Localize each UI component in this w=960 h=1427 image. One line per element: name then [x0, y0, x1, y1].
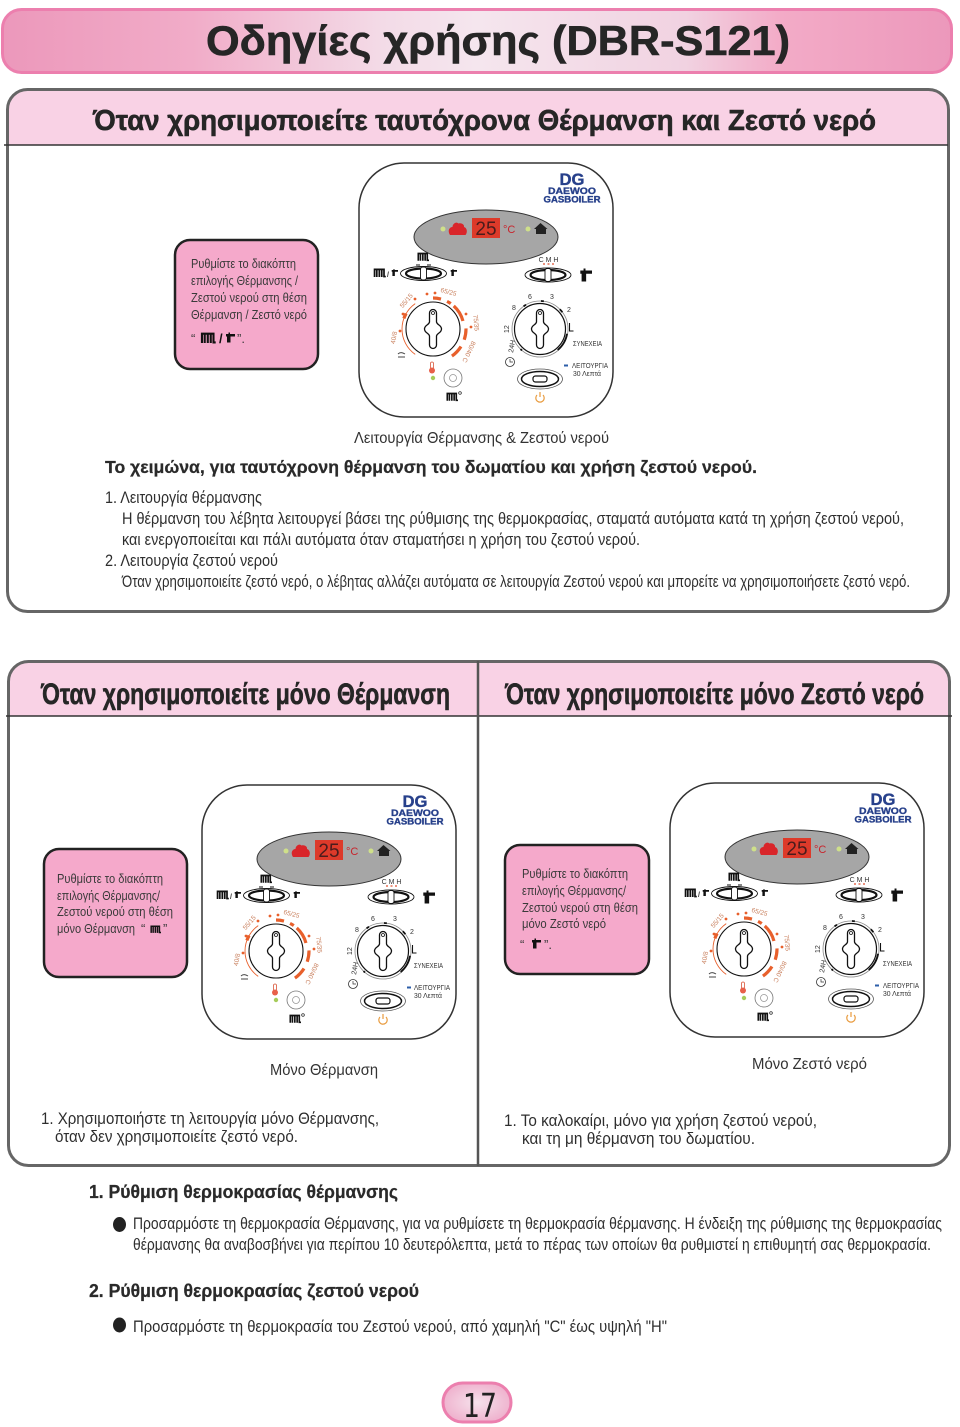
heating selector switch: /: [387, 272, 389, 279]
display: 25: [318, 841, 340, 862]
display: °C: [503, 224, 515, 236]
timer dial: 24H: [351, 961, 360, 975]
callout: hot-water-only instruction: επιλογής Θέρμανσης/: [522, 883, 626, 898]
heating temperature dial: 40/8: [390, 331, 399, 345]
bullet: [113, 1217, 126, 1232]
timer labels: ΣΥΝΕΧΕΙΑ: [883, 961, 912, 968]
clock icon: [506, 358, 514, 366]
reset knob: [287, 991, 305, 1023]
timer dial: 6: [528, 294, 532, 301]
logo: GASBOILER: [386, 816, 444, 828]
logo: DAEWOO: [548, 186, 596, 197]
callout: heating-only instruction: Ρυθμίστε το διακόπτη: [57, 871, 163, 886]
logo: [386, 793, 444, 828]
thermometer and status light: [429, 362, 435, 380]
callout: hot-water-only instruction: “: [520, 937, 524, 952]
callout: selector instruction: /: [219, 331, 223, 346]
text block: hot water only note: και τη μη θέρμανση του δωματίου.: [522, 1130, 755, 1148]
heating temperature dial: 80/40 C: [460, 340, 476, 364]
logo: GASBOILER: [854, 814, 912, 826]
heading: heating and hot water: Όταν χρησιμοποιείτε ταυτόχρονα Θέρμανση και Ζεστό νερό: [92, 105, 876, 137]
panel: heating and hot water together: [4, 90, 948, 612]
clock icon: [816, 978, 826, 986]
timer labels: [564, 341, 608, 378]
text block: heating only note: όταν δεν χρησιμοποιείτε ζεστό νερό.: [55, 1128, 298, 1146]
display: °C: [814, 844, 826, 856]
callout: selector instruction: [175, 240, 318, 369]
callout: selector instruction: “: [191, 331, 195, 346]
timer labels: 30 Λεπτά: [883, 990, 911, 998]
heating temperature dial: 40/8: [233, 953, 242, 967]
timer dial: 8: [512, 305, 516, 312]
text block: hot water only note: [504, 1112, 817, 1148]
heating temperature dial: [701, 907, 791, 984]
text block: heating only note: [41, 1110, 379, 1146]
callout: heating-only instruction: μόνο Θέρμανση: [57, 921, 135, 936]
caption: hot water only: Μόνο Ζεστό νερό: [752, 1056, 867, 1073]
callout: hot-water-only instruction: Ζεστού νερού στη θέση: [522, 900, 638, 915]
heating temperature dial: 75/35: [314, 936, 323, 954]
logo: DG: [560, 171, 584, 189]
heating selector switch: [686, 874, 768, 900]
control panel diagram: [359, 163, 613, 417]
timer dial: 24H: [508, 339, 517, 353]
thermometer and status light: [272, 984, 278, 1002]
timer labels: [875, 961, 919, 998]
panel: single-mode use: [6, 661, 952, 1166]
timer dial: 6: [839, 914, 843, 921]
heating temperature dial: 65/25: [751, 907, 769, 918]
heating temperature dial: 55/15: [242, 914, 258, 932]
timer labels: 30 Λεπτά: [573, 370, 601, 378]
page number: [443, 1383, 511, 1425]
heating temperature dial: [233, 909, 323, 986]
text block: operation notes: [105, 489, 910, 591]
heating temperature dial: 40/8: [701, 951, 710, 965]
power button: [360, 991, 406, 1024]
callout: hot-water-only instruction: Ρυθμίστε το διακόπτη: [522, 866, 628, 881]
callout: selector instruction: Θέρμανση / Ζεστό νερό: [191, 307, 307, 322]
display: 25: [475, 219, 497, 240]
logo: DAEWOO: [391, 808, 439, 819]
timer dial: 3: [550, 294, 554, 301]
timer dial: 12: [347, 947, 354, 955]
timer dial: 12: [504, 325, 511, 333]
logo: [544, 171, 601, 206]
display: [257, 832, 401, 886]
heating selector switch: /: [698, 892, 700, 899]
callout: heating-only instruction: επιλογής Θέρμανσης/: [57, 888, 160, 903]
callout: hot-water-only instruction: ”.: [544, 937, 552, 952]
timer dial: 2: [878, 927, 882, 934]
timer dial: [815, 914, 884, 977]
heating temperature dial: 65/25: [283, 909, 301, 920]
timer dial: 3: [861, 914, 865, 921]
timer labels: ΣΥΝΕΧΕΙΑ: [414, 963, 443, 970]
callout: heating-only instruction: Ζεστού νερού στη θέση: [57, 904, 173, 919]
timer dial: 8: [355, 927, 359, 934]
display: [725, 830, 869, 884]
text block: operation notes: 2. Λειτουργία ζεστού νερού: [105, 552, 278, 570]
heating temperature dial: 75/35: [471, 314, 480, 332]
callout: hot-water-only instruction: [505, 845, 649, 974]
logo: [854, 791, 912, 826]
caption: heating and hot water: Λειτουργία Θέρμανσης & Ζεστού νερού: [354, 430, 609, 447]
text block: operation notes: 1. Λειτουργία θέρμανσης: [105, 489, 262, 507]
display: [414, 210, 558, 264]
timer dial: 3: [393, 916, 397, 923]
callout: heating-only instruction: [44, 849, 187, 977]
subheading: winter use: Το χειμώνα, για ταυτόχρονη θέρμανση του δωματίου και χρήση ζεστού νερού.: [105, 457, 757, 478]
heating temperature dial: 55/15: [710, 912, 726, 930]
timer dial: [347, 916, 416, 979]
hot water selector switch: [525, 257, 592, 282]
timer dial: 2: [567, 307, 571, 314]
logo: DG: [402, 793, 428, 811]
heating temperature dial: 55/15: [399, 292, 415, 310]
timer dial: 8: [823, 925, 827, 932]
heating temperature dial: 80/40 C: [303, 962, 319, 986]
section: heating temperature setting: 1. Ρύθμιση θερμοκρασίας θέρμανσης: [89, 1182, 398, 1202]
hot water selector switch: [368, 879, 435, 904]
heating temperature dial: 75/35: [782, 934, 791, 952]
logo: GASBOILER: [544, 194, 601, 206]
hot water selector switch: C M H: [850, 877, 869, 884]
heating temperature dial: [390, 287, 480, 364]
heating temperature dial: 80/40 C: [771, 960, 787, 984]
display: 25: [786, 839, 808, 860]
reset knob: [444, 369, 462, 401]
logo: DG: [870, 791, 896, 809]
text block: heating only note: 1. Χρησιμοποιήστε τη λειτουργία μόνο Θέρμανσης,: [41, 1110, 379, 1128]
callout: selector instruction: Ζεστού νερού στη θέση: [191, 290, 307, 305]
control panel diagram: hot water only: [670, 783, 924, 1037]
reset knob: [755, 989, 773, 1021]
callout: heating-only instruction: “: [141, 921, 145, 936]
timer labels: ΣΥΝΕΧΕΙΑ: [573, 341, 602, 348]
callout: selector instruction: ”.: [237, 331, 245, 346]
clock icon: [348, 980, 358, 988]
callout: hot-water-only instruction: μόνο Ζεστό νερό: [522, 916, 606, 931]
caption: heating only: Μόνο Θέρμανση: [270, 1062, 378, 1079]
logo: DAEWOO: [859, 806, 907, 817]
hot water selector switch: C M H: [382, 879, 401, 886]
power button: [518, 369, 562, 402]
heating selector switch: [218, 876, 300, 902]
callout: heating-only instruction: ”: [163, 921, 167, 936]
page number: 17: [463, 1386, 497, 1425]
timer labels: [407, 963, 450, 1000]
control panel diagram: heating only: [202, 785, 456, 1039]
timer dial: 6: [371, 916, 375, 923]
hot water selector switch: [836, 877, 903, 902]
section: hot water temperature setting: Προσαρμόστε τη θερμοκρασία του Ζεστού νερού, από χαμηλή "C" έως υψηλή "H": [133, 1318, 667, 1336]
title bar: [2, 10, 952, 72]
title: Οδηγίες χρήσης (DBR-S121): [206, 17, 790, 64]
timer labels: 30 Λεπτά: [414, 992, 442, 1000]
thermometer and status light: [740, 982, 746, 1000]
timer dial: 12: [815, 945, 822, 953]
bullet: [113, 1318, 126, 1332]
text block: hot water only note: 1. Το καλοκαίρι, μόνο για χρήση ζεστού νερού,: [504, 1112, 817, 1130]
timer labels: ΛΕΙΤΟΥΡΓΙΑ: [414, 985, 450, 992]
callout: selector instruction: επιλογής Θέρμανσης /: [191, 273, 298, 288]
heading: heating only: Όταν χρησιμοποιείτε μόνο Θέρμανση: [40, 678, 450, 711]
timer labels: ΛΕΙΤΟΥΡΓΙΑ: [883, 983, 919, 990]
section: hot water temperature setting: [89, 1281, 667, 1336]
timer dial: [504, 294, 574, 357]
heating temperature dial: 65/25: [440, 287, 458, 298]
display: °C: [346, 846, 358, 858]
text block: operation notes: και ενεργοποιείται και πάλι αυτόματα όταν σταματήσει η χρήση του ζεστού νερού.: [122, 531, 640, 549]
hot water selector switch: C M H: [539, 257, 558, 264]
heating selector switch: /: [230, 894, 232, 901]
heating selector switch: [375, 254, 457, 280]
callout: selector instruction: Ρυθμίστε το διακόπτη: [191, 256, 296, 271]
section: hot water temperature setting: 2. Ρύθμιση θερμοκρασίας ζεστού νερού: [89, 1281, 419, 1302]
power button: [828, 989, 874, 1022]
timer labels: ΛΕΙΤΟΥΡΓΙΑ: [572, 363, 608, 370]
section: heating temperature setting: [89, 1182, 942, 1254]
timer dial: 2: [410, 929, 414, 936]
timer dial: 24H: [819, 959, 828, 973]
